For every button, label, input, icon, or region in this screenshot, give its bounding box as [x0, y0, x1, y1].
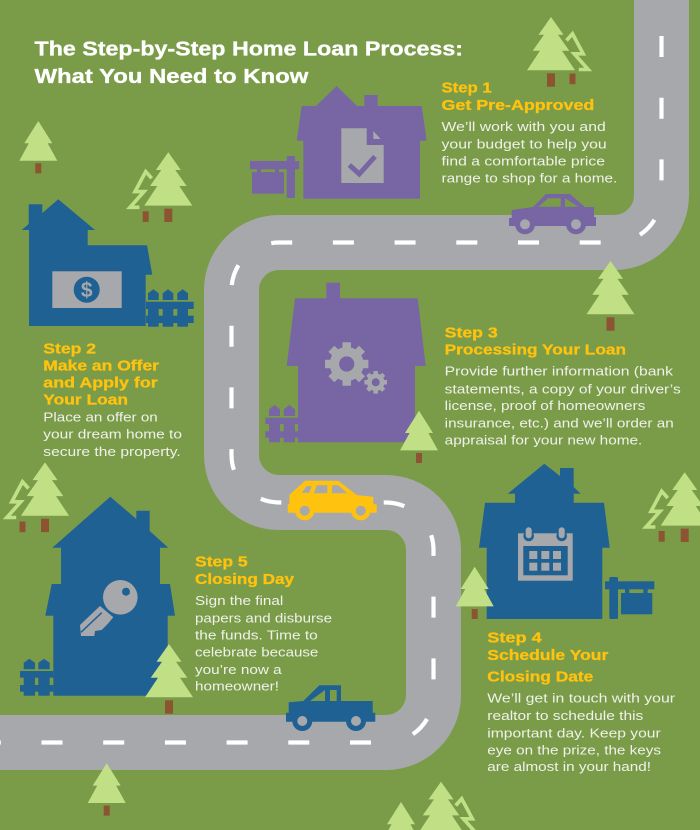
house: step 5	[20, 497, 175, 696]
text: step 3: statements, a copy of your driver’s	[445, 381, 681, 396]
text: step 2	[43, 340, 182, 459]
tree cluster: far right	[646, 472, 700, 542]
text: step 1: Step 1	[442, 80, 492, 97]
text: step 3	[445, 324, 681, 447]
tree: on step 5 house	[145, 644, 193, 714]
text: step 5: papers and disburse	[195, 611, 332, 626]
text: step 2: secure the property.	[43, 444, 181, 459]
text: step 3: insurance, etc.) and we’ll order an	[445, 415, 674, 430]
text: step 4: realtor to schedule this	[487, 708, 644, 723]
car: yellow	[288, 481, 377, 520]
text: step 2: Step 2	[43, 340, 96, 357]
house: step 2	[22, 199, 194, 327]
icon: fence	[146, 289, 194, 327]
text: step 1	[442, 80, 617, 186]
icon: sold sign	[605, 577, 654, 619]
text: step 5: Step 5	[195, 554, 248, 571]
icon: calendar	[518, 527, 573, 581]
text: step 5: Sign the final	[195, 593, 283, 608]
tree cluster: above step 2 house	[130, 152, 192, 222]
icon: cash with dollar sign	[52, 271, 122, 308]
tree cluster: left of step 5 house	[7, 462, 69, 532]
tree: top left	[19, 121, 57, 173]
icon: for sale sign	[250, 156, 299, 198]
icon: key	[80, 580, 138, 636]
text: step 5	[195, 554, 332, 694]
text: step 3: Provide further information (bank	[445, 364, 674, 379]
text: step 4: important day. Keep your	[487, 725, 661, 740]
text: step 1: find a comfortable price	[442, 154, 605, 169]
text: step 1: We’ll work with you and	[442, 119, 606, 134]
text: step 4: Step 4	[487, 630, 542, 647]
text: step 5: celebrate because	[195, 645, 318, 660]
tree: beside step 4 house	[456, 567, 494, 619]
tree cluster: bottom	[382, 782, 477, 830]
title: What You Need to Know	[34, 65, 308, 88]
tree: right of road	[586, 261, 634, 331]
text: step 1: your budget to help you	[442, 136, 607, 151]
tree: on step 3 house	[400, 411, 438, 463]
icon: gears	[325, 342, 387, 394]
icon: fence	[265, 405, 298, 442]
text: step 2: and Apply for	[43, 375, 158, 392]
text: step 1: range to shop for a home.	[442, 171, 617, 186]
text: step 4: Schedule Your	[487, 647, 608, 664]
text: step 3: license, proof of homeowners	[445, 398, 646, 413]
truck: blue	[286, 685, 375, 731]
text: step 5: Closing Day	[195, 571, 295, 588]
title	[34, 38, 463, 88]
title: The Step-by-Step Home Loan Process:	[34, 38, 463, 60]
car: purple	[509, 194, 596, 234]
text: step 5: you’re now a	[195, 662, 283, 677]
house: step 3	[265, 283, 426, 442]
text: step 4: We’ll get in touch with your	[487, 691, 676, 706]
text: step 2: your dream home to	[43, 427, 182, 442]
icon: fence	[20, 659, 53, 696]
text: step 5: the funds. Time to	[195, 627, 318, 642]
text: step 4	[487, 630, 676, 774]
text: step 4: are almost in your hand!	[487, 759, 651, 774]
text: step 5: homeowner!	[195, 679, 279, 694]
icon: document with check	[341, 128, 384, 183]
text: step 3: Processing Your Loan	[445, 341, 626, 358]
text: step 2: Your Loan	[43, 392, 128, 409]
text: step 4: Closing Date	[487, 669, 593, 686]
text: step 4: eye on the prize, the keys	[487, 742, 662, 757]
text: step 3: Step 3	[445, 324, 498, 341]
text: step 2: Make an Offer	[43, 358, 159, 375]
tree: bottom left	[88, 763, 126, 816]
text: step 3: appraisal for your new home.	[445, 432, 642, 447]
house: step 1	[250, 86, 427, 199]
house: step 4	[479, 464, 654, 619]
text: step 1: Get Pre-Approved	[442, 97, 594, 114]
text: step 2: Place an offer on	[43, 410, 158, 425]
tree cluster: top right	[527, 17, 588, 87]
icon: cash with dollar sign: $	[81, 279, 93, 302]
